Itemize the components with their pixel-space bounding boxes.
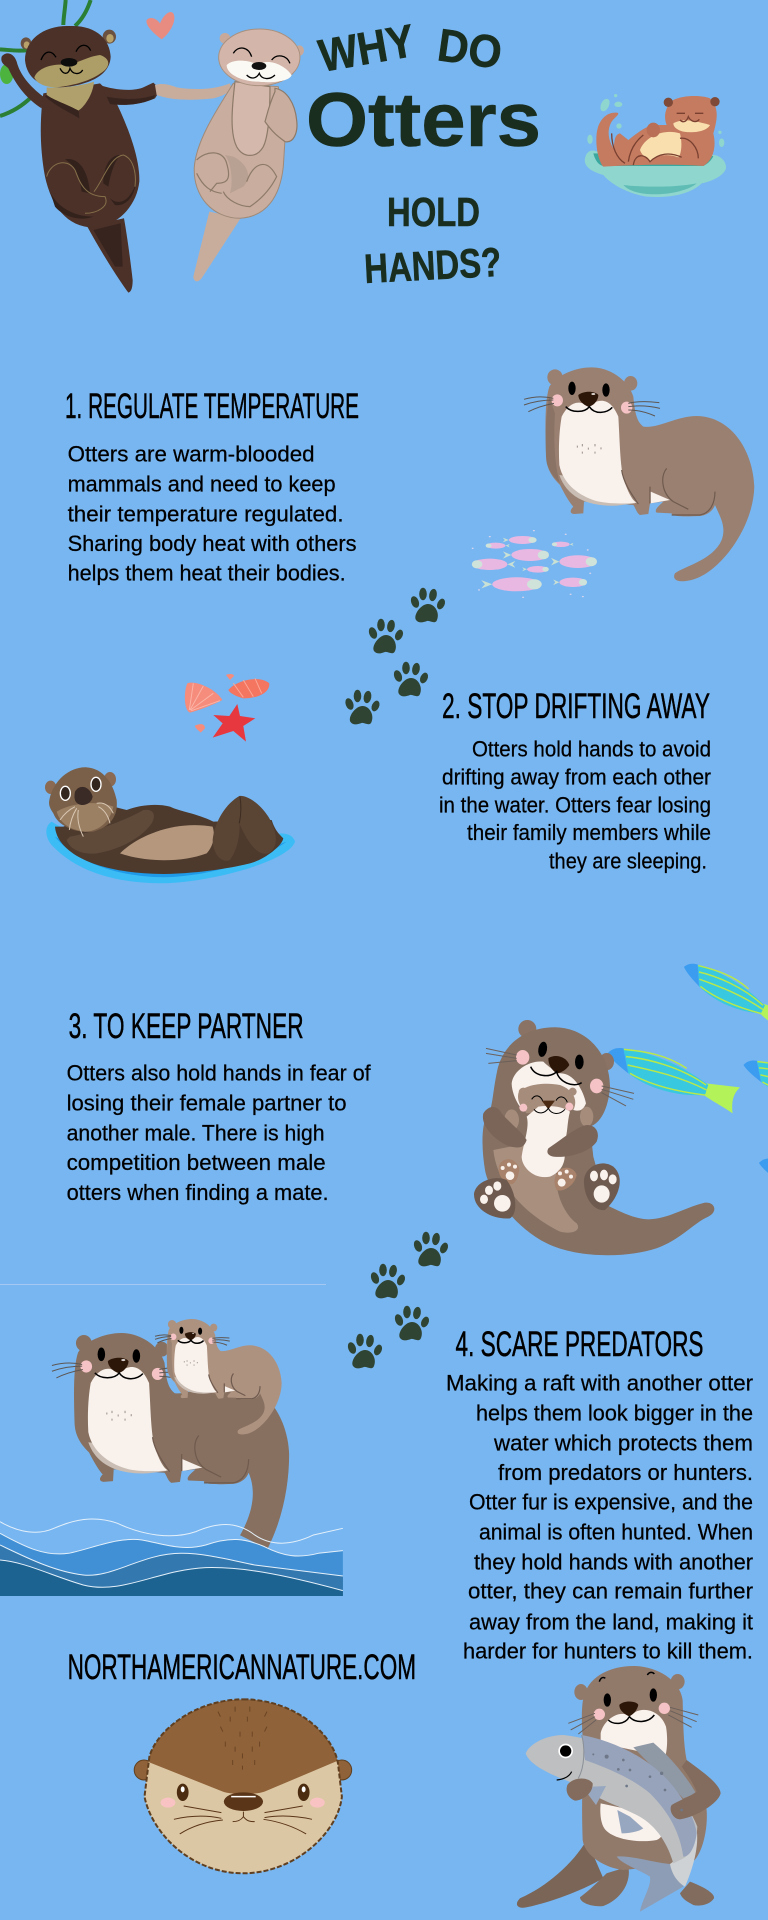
- section 4 text: they hold hands with another: [474, 1549, 753, 1574]
- vines: [0, 0, 91, 116]
- waves illustration: [0, 1519, 343, 1596]
- section 4 text: harder for hunters to kill them.: [463, 1639, 753, 1664]
- section 1 text: mammals and need to keep: [68, 472, 336, 497]
- section 2 text: their family members while: [467, 820, 711, 845]
- section 3 text: Otters also hold hands in fear of: [67, 1061, 371, 1086]
- section 1 heading: 1. REGULATE TEMPERATURE: [65, 387, 359, 426]
- otters holding hands illustration: [0, 0, 304, 293]
- title: [306, 14, 541, 292]
- icon: paw prints lower trail: [346, 1232, 450, 1368]
- large otter: [52, 1333, 289, 1549]
- dark brown otter: [1, 26, 161, 293]
- section 1 text: Otters are warm-blooded: [68, 442, 315, 467]
- section 2 text: in the water. Otters fear losing: [439, 792, 711, 817]
- section 3 text: losing their female partner to: [67, 1091, 347, 1116]
- section 4 text: Making a raft with another otter: [446, 1371, 753, 1396]
- fish school illustration: [472, 530, 597, 598]
- beige otter: [155, 29, 304, 281]
- title: DO: [435, 18, 505, 79]
- standing otter illustration: [524, 367, 754, 581]
- section 4 text: animal is often hunted. When: [479, 1519, 753, 1544]
- otter with pup on back illustration: [52, 1319, 289, 1549]
- title: Otters: [306, 78, 541, 163]
- section 4 text: Otter fur is expensive, and the: [469, 1490, 753, 1515]
- section 4 text: otter, they can remain further: [468, 1579, 753, 1604]
- floating otter illustration: [45, 767, 295, 883]
- section 3 text: [67, 1061, 371, 1205]
- otter holding fish illustration: [517, 1666, 721, 1912]
- section 4 text: water which protects them: [493, 1430, 753, 1455]
- section 2 text: Otters hold hands to avoid: [472, 737, 711, 762]
- round otter face illustration: [134, 1697, 352, 1877]
- icon: paw prints upper trail: [344, 588, 447, 724]
- section 1 text: helps them heat their bodies.: [68, 561, 346, 586]
- website footer: NORTHAMERICANNATURE.COM: [68, 1648, 416, 1687]
- title: WHY: [315, 14, 418, 82]
- section 2 text: [439, 737, 711, 873]
- pup otter: [155, 1319, 282, 1435]
- section 2 text: they are sleeping.: [549, 848, 707, 873]
- section 1 text: [68, 442, 357, 586]
- title: HANDS?: [363, 239, 502, 292]
- otter on island illustration: [585, 94, 726, 197]
- section 4 text: helps them look bigger in the: [476, 1400, 753, 1425]
- icon: heart: [146, 12, 174, 39]
- section 3 text: otters when finding a mate.: [67, 1180, 329, 1205]
- title: HOLD: [387, 189, 480, 235]
- section 4 text: [446, 1371, 753, 1664]
- section 3 text: another male. There is high: [67, 1120, 325, 1145]
- section 3 heading: 3. TO KEEP PARTNER: [69, 1007, 304, 1046]
- section 1 text: Sharing body heat with others: [68, 531, 357, 556]
- section 4 text: from predators or hunters.: [498, 1460, 753, 1485]
- section 1 text: their temperature regulated.: [68, 502, 344, 527]
- otter mother and pup illustration: [474, 1020, 714, 1255]
- stripe fish illustration: [608, 963, 768, 1214]
- section 3 text: competition between male: [67, 1150, 326, 1175]
- shells and starfish illustration: [185, 674, 269, 742]
- section 4 text: away from the land, making it: [469, 1609, 753, 1634]
- section 2 text: drifting away from each other: [442, 764, 711, 789]
